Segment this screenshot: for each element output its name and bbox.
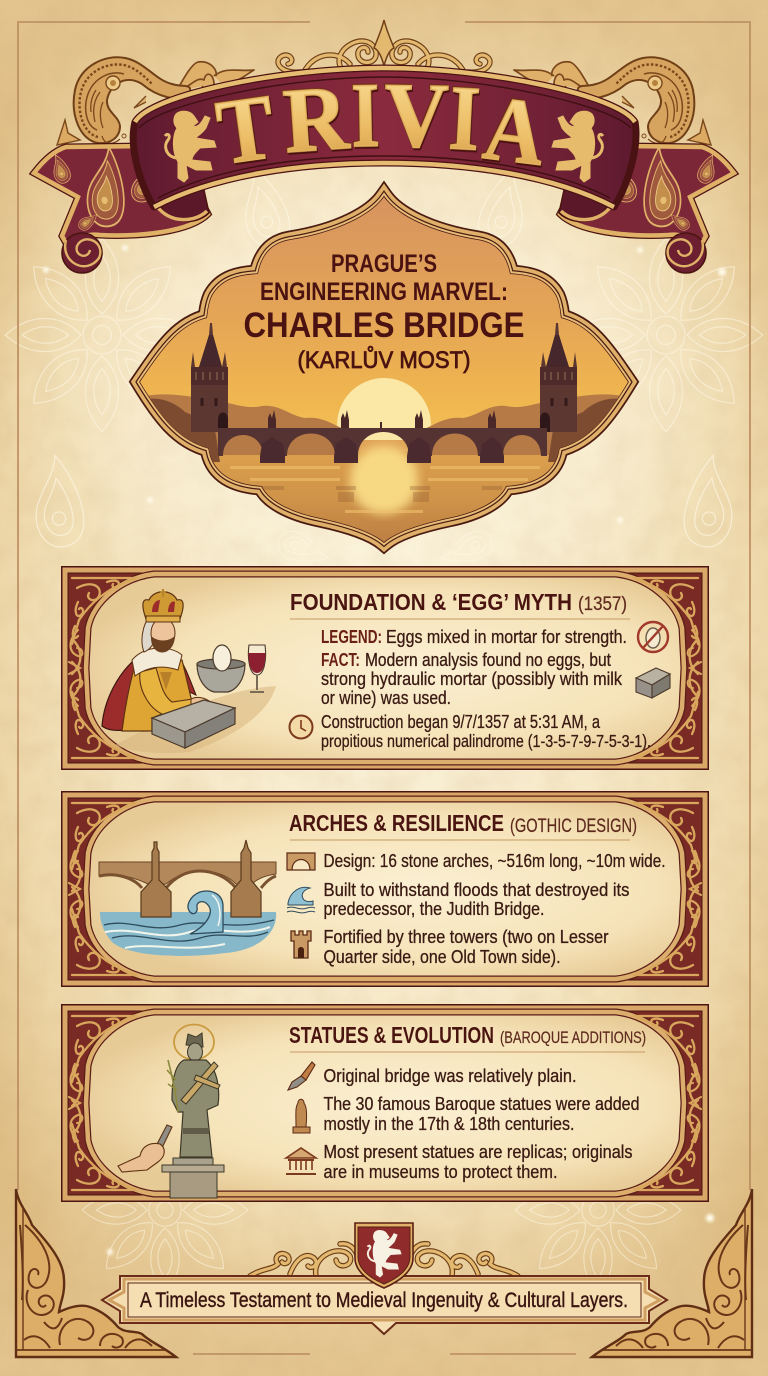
panel text: strong hydraulic mortar (possibly with milk	[321, 668, 623, 689]
icon: mortar brick	[636, 668, 670, 698]
panel text: propitious numerical palindrome (1-3-5-7-9-7-5-3-1).	[321, 731, 651, 751]
icon: statue	[293, 1099, 310, 1133]
panel text: LEGEND:	[321, 626, 382, 647]
panel text: Design: 16 stone arches, ~516m long, ~10m wide.	[324, 850, 666, 871]
panel text: Built to withstand floods that destroyed its	[324, 879, 630, 900]
icon: chisel	[288, 1062, 315, 1090]
sunset plaque	[130, 190, 640, 550]
icon: arch	[287, 853, 315, 870]
banner title: T	[211, 75, 281, 184]
plaque title	[244, 250, 524, 374]
panel text: predecessor, the Judith Bridge.	[324, 898, 544, 919]
icon: tower	[291, 931, 311, 958]
footer text: A Timeless Testament to Medieval Ingenuity & Cultural Layers.	[140, 1289, 628, 1312]
banner title: A	[479, 76, 551, 185]
banner title	[211, 63, 551, 185]
footer ribbon	[102, 1276, 667, 1334]
panel text: The 30 famous Baroque statues were added	[324, 1093, 640, 1114]
panel: arches and resilience	[62, 792, 708, 986]
panel: foundation and egg myth	[62, 567, 708, 769]
panel text	[324, 850, 666, 967]
panel frame	[62, 792, 708, 986]
panel text: Most present statues are replicas; originals	[324, 1141, 632, 1162]
right ribbon tail	[559, 146, 734, 273]
banner title: R	[280, 66, 353, 172]
panel text: Quarter side, one Old Town side).	[324, 946, 560, 967]
panel frame	[62, 567, 708, 769]
bridge scene	[130, 190, 640, 550]
heading: FOUNDATION & ‘EGG’ MYTH	[290, 589, 572, 615]
illustration: bridge and flood wave	[99, 840, 276, 956]
banner title: I	[351, 64, 380, 166]
icon: museum	[286, 1148, 316, 1174]
panel text: Modern analysis found no eggs, but	[365, 649, 611, 670]
banner title: V	[384, 63, 449, 167]
upper right paisley	[514, 57, 711, 145]
king illustration	[102, 589, 276, 753]
upper left paisley	[57, 57, 254, 145]
rule	[290, 618, 630, 620]
central banner	[133, 63, 636, 207]
icon: clock	[290, 716, 312, 738]
plaque title: PRAGUE’S	[331, 250, 437, 278]
panel text: Eggs mixed in mortar for strength.	[386, 626, 627, 647]
footer scrollwork	[250, 1244, 518, 1276]
illustration: hand with chisel	[118, 1125, 172, 1172]
panel: statues and evolution	[62, 1005, 708, 1201]
plaque title: CHARLES BRIDGE	[244, 306, 524, 345]
banner title: I	[447, 66, 482, 170]
left ribbon tail	[34, 146, 209, 273]
wine glass	[248, 645, 266, 692]
left lion	[165, 111, 216, 182]
heading: STATUES & EVOLUTION	[289, 1022, 494, 1048]
plaque title: ENGINEERING MARVEL:	[260, 278, 508, 306]
icon: no egg	[638, 622, 668, 652]
mortar bowl with egg	[197, 645, 245, 692]
panel text: FACT:	[321, 649, 360, 670]
panel text: or wine) was used.	[321, 687, 451, 708]
heading: ARCHES & RESILIENCE	[289, 810, 504, 836]
plaque title: (KARLŮV MOST)	[298, 345, 470, 374]
rule	[290, 839, 630, 841]
crest lion	[368, 1230, 401, 1277]
panel text: Fortified by three towers (two on Lesser	[324, 926, 608, 947]
panel text: mostly in the 17th & 18th centuries.	[324, 1113, 574, 1134]
icon: wave	[287, 887, 315, 913]
heading: (BAROQUE ADDITIONS)	[500, 1028, 646, 1047]
panel text	[321, 626, 651, 751]
bottom left corner ornament	[16, 1189, 176, 1357]
heading: (1357)	[578, 594, 627, 615]
stone block	[152, 700, 235, 748]
panel text	[324, 1065, 640, 1182]
panel text: Construction began 9/7/1357 at 5:31 AM, a	[321, 711, 601, 732]
shield crest	[355, 1223, 413, 1288]
panel frame	[62, 1005, 708, 1201]
illustration: statue	[162, 1024, 224, 1198]
panel text: Original bridge was relatively plain.	[324, 1065, 576, 1086]
panel text: are in museums to protect them.	[324, 1161, 558, 1182]
bottom right corner ornament	[592, 1189, 752, 1357]
heading: (GOTHIC DESIGN)	[510, 816, 637, 837]
top crown ornament	[278, 20, 490, 72]
rule	[290, 1051, 645, 1053]
right lion	[552, 111, 603, 182]
